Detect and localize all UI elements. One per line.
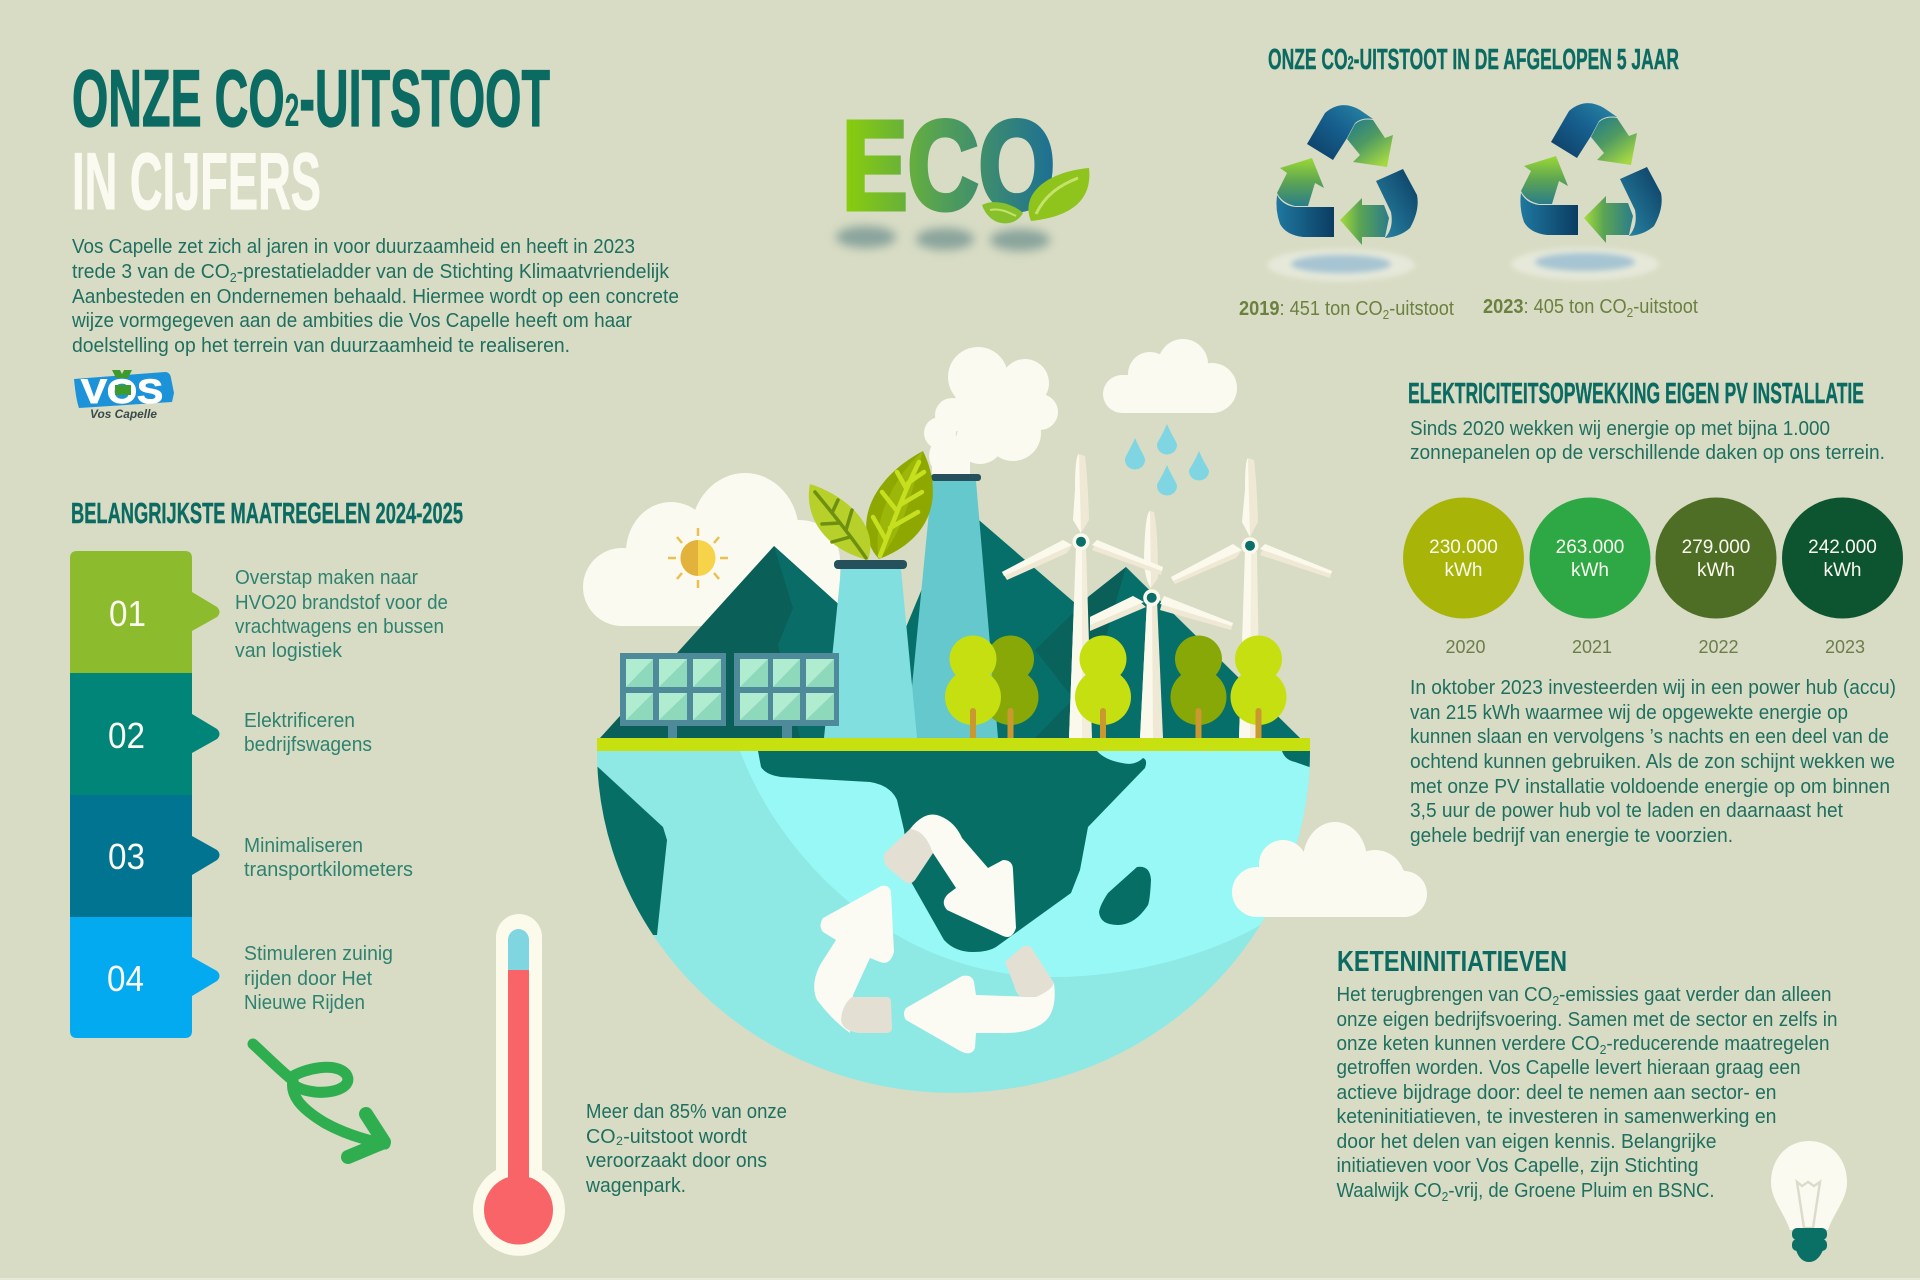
intro paragraph: Aanbesteden en Ondernemen behaald. Hiermee wordt op een concrete xyxy=(72,286,679,308)
icon: recycle 2019 xyxy=(1267,105,1418,281)
circle 2020: 2020 xyxy=(1445,637,1486,657)
PV body text xyxy=(1410,677,1896,847)
cloud: rain xyxy=(1103,339,1237,495)
cloud: left xyxy=(583,473,840,626)
keten body text: 2 xyxy=(1600,1042,1606,1057)
chimney: front xyxy=(824,560,917,738)
PV body text: gehele bedrijf van energie te voorzien. xyxy=(1410,825,1733,847)
keten body text: 2 xyxy=(1552,993,1559,1008)
chart: kWh circles xyxy=(1403,498,1903,657)
keten body text: initiatieven voor Vos Capelle, zijn Stichting xyxy=(1336,1155,1698,1177)
thermometer caption: wagenpark. xyxy=(585,1175,686,1197)
intro paragraph: wijze vormgegeven aan de ambities die Vos Capelle heeft om haar xyxy=(71,310,632,332)
keten body text: keteninitiatieven, te investeren in samenwerking en xyxy=(1336,1106,1776,1128)
keten body text: getroffen worden. Vos Capelle levert hieraan graag een xyxy=(1336,1057,1800,1079)
circle 2020 xyxy=(1403,498,1524,657)
measure text 01: vrachtwagens en bussen xyxy=(235,616,444,638)
intro paragraph: Vos Capelle zet zich al jaren in voor duurzaamheid en heeft in 2023 xyxy=(72,236,635,258)
keten body text: 2 xyxy=(1442,1189,1448,1204)
pool shadow xyxy=(1267,249,1415,281)
PV body text: In oktober 2023 investeerden wij in een power hub (accu) xyxy=(1410,677,1896,699)
heading: afgelopen 5 jaar: ONZE CO2-UITSTOOT IN DE AFGELOPEN 5 JAAR xyxy=(1268,44,1679,76)
logo: Vos Capelle: VOS xyxy=(81,373,163,411)
intro paragraph: doelstelling op het terrein van duurzaamheid te realiseren. xyxy=(72,335,570,357)
keten body text: onze eigen bedrijfsvoering. Samen met de sector en zelfs in xyxy=(1336,1009,1838,1031)
icon: light bulb xyxy=(1771,1141,1847,1262)
wind turbine: left xyxy=(1002,454,1163,738)
circle 2022: 279.000 xyxy=(1682,537,1750,558)
measure text 02: bedrijfswagens xyxy=(244,734,372,756)
pool shadow xyxy=(1511,248,1659,280)
intro paragraph: trede 3 van de CO xyxy=(72,261,235,283)
central illustration xyxy=(583,339,1427,1105)
measure text 03: transportkilometers xyxy=(244,859,413,881)
title xyxy=(72,54,550,227)
cloud: lower right xyxy=(1232,822,1427,917)
eco shadows xyxy=(836,226,1050,251)
caption 2023: 2023: 405 ton CO xyxy=(1483,296,1637,318)
PV intro text xyxy=(1410,418,1885,464)
PV intro text: Sinds 2020 wekken wij energie op met bijna 1.000 xyxy=(1410,418,1830,440)
measure text 04: rijden door Het xyxy=(244,968,372,990)
measure text 03: Minimaliseren xyxy=(244,835,363,857)
caption 2019: 2 xyxy=(1383,307,1389,322)
rain drops xyxy=(1125,424,1209,495)
step 02: 02 xyxy=(108,715,145,756)
circle 2023: kWh xyxy=(1824,560,1862,581)
PV body text: kunnen slaan en vervolgens ’s nachts en een deel van de xyxy=(1410,726,1889,748)
thermometer caption: veroorzaakt door ons xyxy=(586,1150,767,1172)
thermometer caption xyxy=(585,1101,787,1197)
leaf: small xyxy=(809,484,870,560)
measures block stack xyxy=(70,551,220,1038)
recycle arrow: left xyxy=(814,886,894,1033)
intro paragraph xyxy=(71,236,679,357)
circle 2021: 2021 xyxy=(1572,637,1612,657)
circle 2023: 242.000 xyxy=(1808,537,1877,558)
thermometer caption: CO₂-uitstoot wordt xyxy=(586,1126,747,1148)
eco word: ECO xyxy=(842,95,1055,236)
PV body text: met onze PV installatie voldoende energie op om binnen xyxy=(1410,776,1890,798)
caption 2023: -uitstoot xyxy=(1633,296,1698,318)
measure text 04 xyxy=(244,943,393,1014)
measure text 04: Stimuleren zuinig xyxy=(244,943,393,965)
mountains xyxy=(600,502,1300,738)
eco leaves xyxy=(982,168,1089,223)
globe xyxy=(590,745,1320,1105)
keten body text: -vrij, de Groene Pluim en BSNC. xyxy=(1448,1180,1714,1202)
measure text 01 xyxy=(235,567,448,662)
title: ONZE CO2-UITSTOOT xyxy=(72,54,550,144)
keten body text: Het terugbrengen van CO xyxy=(1336,984,1566,1006)
icon: recycle 2023 xyxy=(1511,103,1662,280)
step 04 xyxy=(70,917,220,1038)
measure text 01: van logistiek xyxy=(235,640,343,662)
PV body text: ochtend kunnen gebruiken. Als de zon schijnt wekken we xyxy=(1410,751,1895,773)
recycle arrow: bottom xyxy=(904,946,1055,1053)
ground bar xyxy=(597,738,1310,751)
chimney: rear xyxy=(907,474,998,738)
PV intro text: zonnepanelen op de verschillende daken op ons terrein. xyxy=(1410,442,1885,464)
wind turbine: middle xyxy=(1090,511,1233,738)
caption 2023: 2 xyxy=(1627,305,1633,320)
caption 2019: 2019: 451 ton CO xyxy=(1239,298,1393,320)
cloud: smoke xyxy=(924,347,1058,477)
heading: keteninitiatieven: KETENINITIATIEVEN xyxy=(1337,946,1567,978)
intro paragraph: 2 xyxy=(230,270,237,285)
keten body text: door het delen van eigen kennis. Belangrijke xyxy=(1336,1131,1716,1153)
solar panel: left xyxy=(620,653,726,738)
heading: belangrijkste maatregelen: BELANGRIJKSTE MAATREGELEN 2024-2025 xyxy=(71,498,463,530)
measure text 01: Overstap maken naar xyxy=(235,567,418,589)
step 02 xyxy=(70,673,220,795)
keten body text: -emissies gaat verder dan alleen xyxy=(1559,984,1832,1006)
keten body text: actieve bijdrage door: deel te nemen aan sector- en xyxy=(1336,1082,1776,1104)
solar panel: right xyxy=(734,653,839,738)
wind turbine: right xyxy=(1171,458,1332,738)
icon: thermometer xyxy=(473,914,565,1256)
circle 2023 xyxy=(1782,498,1903,657)
step 03: 03 xyxy=(108,836,145,877)
leaf: large xyxy=(866,451,933,559)
circle 2021: kWh xyxy=(1571,560,1609,581)
logo: Vos Capelle xyxy=(74,370,174,421)
keten body text: Waalwijk CO xyxy=(1336,1180,1450,1202)
keten body text: -reducerende maatregelen xyxy=(1606,1033,1830,1055)
circle 2022: 2022 xyxy=(1698,637,1739,657)
step 01: 01 xyxy=(109,593,146,634)
logo: Vos Capelle: Vos Capelle xyxy=(90,407,157,421)
icon: sun xyxy=(668,528,728,588)
step 04: 04 xyxy=(107,958,144,999)
circle 2021: 263.000 xyxy=(1556,537,1624,558)
recycle arrow: top xyxy=(884,815,1016,937)
eco logo xyxy=(836,95,1089,251)
circle 2022: kWh xyxy=(1697,560,1735,581)
PV body text: van 215 kWh waarmee wij de opgewekte energie op xyxy=(1410,702,1848,724)
circle 2022 xyxy=(1656,498,1776,657)
measure text 04: Nieuwe Rijden xyxy=(244,992,365,1014)
measure text 02: Elektrificeren xyxy=(244,710,355,732)
thermometer caption: Meer dan 85% van onze xyxy=(586,1101,787,1123)
title: IN CIJFERS xyxy=(72,137,321,227)
measure text 01: HVO20 brandstof voor de xyxy=(235,592,448,614)
circle 2020: 230.000 xyxy=(1429,537,1498,558)
step 01 xyxy=(70,551,220,673)
trees xyxy=(945,636,1286,742)
intro paragraph: -prestatieladder van de Stichting Klimaatvriendelijk xyxy=(237,261,670,283)
PV body text: 3,5 uur de power hub vol te laden en daarnaast het xyxy=(1410,800,1843,822)
arrow: green squiggle xyxy=(253,1044,385,1157)
measure text 02 xyxy=(244,710,372,756)
caption 2019: -uitstoot xyxy=(1389,298,1454,320)
circle 2021 xyxy=(1530,498,1650,657)
circle 2023: 2023 xyxy=(1825,637,1865,657)
keten body text: onze keten kunnen verdere CO xyxy=(1336,1033,1614,1055)
circle 2020: kWh xyxy=(1444,560,1482,581)
keten body text xyxy=(1336,984,1838,1204)
step 03 xyxy=(70,795,220,917)
measure text 03 xyxy=(244,835,413,881)
